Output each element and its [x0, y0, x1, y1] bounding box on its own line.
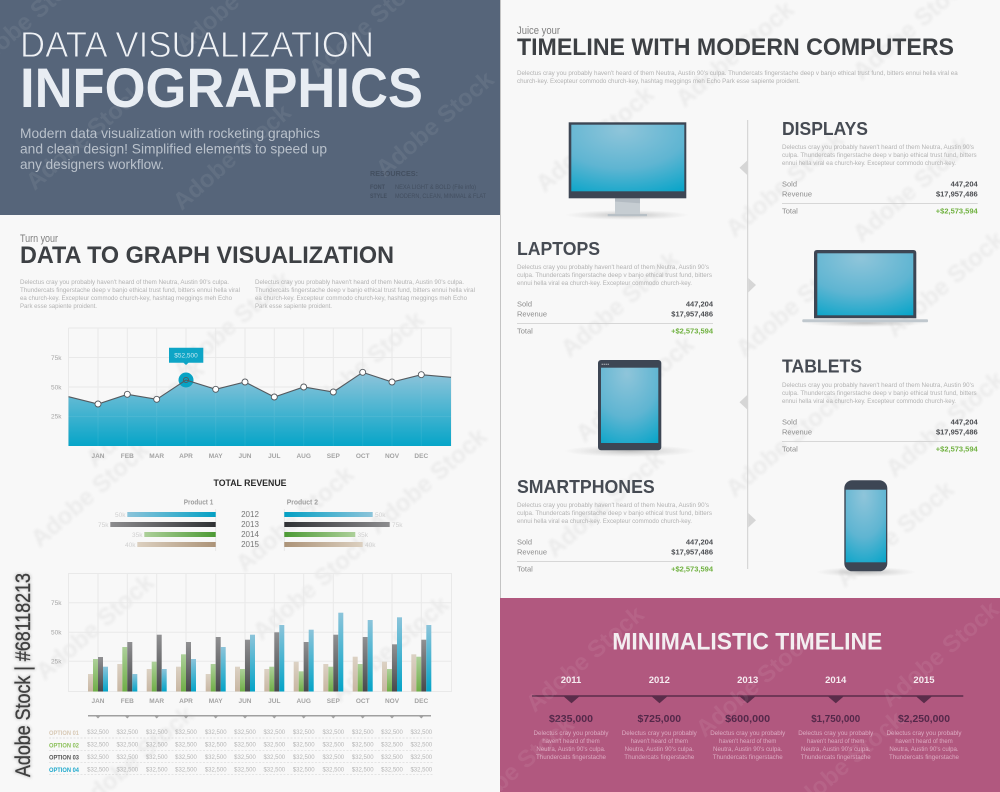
bar values: 75k [98, 522, 109, 529]
month labels: OCT [356, 453, 370, 460]
row values: $32,500 [175, 755, 198, 761]
month labels: SEP [327, 698, 340, 705]
month labels: JUN [238, 698, 252, 705]
option labels: OPTION 03 [49, 755, 79, 762]
data line [68, 372, 451, 404]
month labels [91, 453, 428, 460]
laptops description: culpa. Thundercats fingerstache deep v banjo ethical trust fund, bitters [517, 272, 713, 279]
displays stats: Sold [782, 180, 797, 188]
row values: $32,500 [87, 755, 110, 761]
text block: right column: Thundercats fingerstache deep v banjo ethical trust fund, bitters ennui hella viral [255, 287, 476, 294]
row values: $32,500 [322, 730, 345, 736]
tablets description: ennui hella viral ea church-key. Excepteur commodo church-key. [782, 398, 956, 405]
tablets stats: Revenue [782, 428, 812, 436]
row values: $32,500 [175, 767, 198, 773]
row values: $32,500 [116, 730, 139, 736]
displays description [782, 144, 977, 167]
row values: $32,500 [263, 755, 286, 761]
timeline years: 2014 [825, 675, 847, 686]
y axis labels: 75k [51, 600, 62, 607]
icon: smartphone [816, 480, 916, 577]
header description: Modern data visualization with rocketing graphics [20, 125, 320, 141]
option labels: OPTION 02 [49, 742, 79, 749]
infographic canvas: Adobe Stock [21, 79, 150, 196]
timeline amounts: $1,750,000 [811, 714, 861, 725]
header description: any designers workflow. [20, 156, 164, 172]
month labels: JUL [268, 453, 280, 460]
y axis labels: 50k [51, 384, 62, 392]
smartphones description [517, 502, 713, 525]
header description: and clean design! Simplified elements to speed up [20, 140, 327, 156]
area chart [51, 328, 451, 460]
resources note: MODERN, CLEAN, MINIMAL & FLAT [395, 194, 486, 200]
row values: $32,500 [293, 742, 315, 748]
month labels: OCT [356, 698, 370, 705]
infographic canvas: Adobe Stock [556, 246, 685, 363]
product labels: Product 1 [184, 500, 213, 506]
smartphones stats [517, 538, 714, 574]
infographic canvas: Adobe Stock [721, 386, 850, 503]
tablets stats: Sold [782, 418, 797, 426]
laptops stats [517, 300, 714, 336]
bars: jun [235, 635, 255, 692]
y axis labels: 50k [51, 630, 62, 636]
row values: $32,500 [381, 755, 404, 761]
month labels: DEC [414, 698, 428, 705]
text block: timeline intro: church-key. Excepteur commodo church-key, hashtag meggings meh Echo Park esse sapiente proident. [517, 78, 800, 85]
text block: right column: Delectus cray you probably haven't heard of them Neutra, Austin 90's culpa. [255, 279, 464, 286]
timeline descriptions: Delectus cray you probably [886, 730, 962, 737]
month labels: SEP [327, 453, 340, 460]
infographic canvas: Adobe Stock [301, 306, 430, 423]
infographic canvas: Adobe Stock [721, 126, 850, 243]
displays stats: Revenue [782, 190, 812, 198]
text block: left column: Delectus cray you probably haven't heard of them Neutra, Austin 90's culpa. [20, 279, 229, 286]
smartphones description: culpa. Thundercats fingerstache deep v banjo ethical trust fund, bitters [517, 510, 713, 517]
tablets stats [782, 418, 979, 454]
panel: header [0, 0, 500, 215]
laptops stats: Revenue [517, 310, 547, 318]
displays description: culpa. Thundercats fingerstache deep v banjo ethical trust fund, bitters [782, 152, 977, 159]
bars: oct [353, 620, 373, 692]
infographic canvas: Adobe Stock [364, 423, 493, 540]
row values: $32,500 [205, 767, 227, 773]
row values: $32,500 [205, 742, 227, 748]
timeline descriptions: Delectus cray you probably [534, 730, 609, 737]
text block: left column: ea church-key. Excepteur commodo church-key, hashtag meggings meh Echo [20, 295, 232, 302]
panel: minimalistic timeline [500, 598, 1000, 792]
row values: $32,500 [146, 767, 168, 773]
row values: $32,500 [87, 730, 110, 736]
infographic canvas: Adobe Stock [371, 66, 500, 183]
row values: $32,500 [146, 742, 168, 748]
row values: $32,500 [234, 767, 256, 773]
area fill [68, 372, 451, 446]
text block: left column [20, 279, 241, 310]
timeline years: 2015 [913, 675, 935, 686]
month labels: FEB [121, 453, 134, 460]
smartphones stats: $17,957,486 [671, 548, 713, 556]
bars: mar [147, 635, 167, 692]
month labels: JUN [238, 453, 252, 460]
row values: $32,500 [87, 742, 110, 748]
row values: $32,500 [410, 730, 433, 736]
row values: $32,500 [146, 755, 168, 761]
row values: $32,500 [293, 755, 315, 761]
product 2 bars [284, 512, 390, 547]
bars: jul [264, 625, 284, 692]
smartphones stats: Sold [517, 538, 532, 546]
infographic canvas: Adobe Stock [168, 99, 297, 216]
timeline descriptions: haven't heard of them [719, 738, 776, 745]
timeline years [561, 675, 935, 686]
infographic canvas: Adobe Stock [31, 569, 160, 686]
month labels: AUG [296, 453, 311, 460]
row values: $32,500 [116, 755, 139, 761]
laptops stats: Sold [517, 300, 532, 308]
tablets stats: +$2,573,594 [936, 444, 979, 454]
timeline descriptions: Thundercats fingerstache [624, 754, 695, 761]
row values: $32,500 [322, 767, 345, 773]
y axis labels: 25k [51, 414, 62, 420]
timeline descriptions: Neutra, Austin 90's culpa. [625, 746, 694, 753]
icon: monitor [565, 122, 689, 220]
y axis labels [51, 600, 62, 666]
bars: feb [117, 642, 137, 692]
laptops description: Delectus cray you probably haven't heard of them Neutra, Austin 90's [517, 264, 710, 271]
year labels [241, 510, 259, 549]
chart title: TOTAL REVENUE [214, 478, 286, 488]
laptops stats: $17,957,486 [671, 310, 713, 318]
year labels: 2013 [241, 520, 259, 529]
bar values: 35k [358, 532, 369, 539]
month labels [91, 698, 428, 705]
timeline amounts [549, 714, 950, 725]
infographic canvas: Adobe Stock [691, 626, 820, 743]
timeline title: MINIMALISTIC TIMELINE [612, 628, 882, 655]
bar values: 40k [125, 542, 136, 549]
header description [20, 125, 327, 172]
month labels: JAN [91, 453, 105, 460]
tablets stats: 447,204 [951, 418, 979, 426]
infographic canvas: Adobe Stock [26, 436, 155, 553]
timeline descriptions: Thundercats fingerstache [713, 754, 783, 761]
infographic canvas: Adobe Stock [248, 529, 377, 646]
product labels: Product 2 [287, 500, 318, 506]
section: smartphones: SMARTPHONES [517, 477, 655, 497]
icon: tablet [564, 360, 696, 457]
timeline descriptions: Neutra, Austin 90's culpa. [713, 746, 783, 753]
row values: $32,500 [87, 767, 110, 773]
displays stats [782, 180, 979, 216]
option labels: OPTION 01 [49, 730, 79, 737]
section: laptops: LAPTOPS [517, 239, 600, 259]
product labels [184, 500, 318, 506]
bar values: 40k [365, 542, 376, 549]
text block: left column: Park esse sapiente proident. [20, 303, 97, 310]
row values: $32,500 [205, 755, 227, 761]
infographic canvas: Adobe Stock [831, 476, 960, 593]
month labels: NOV [385, 698, 400, 705]
timeline descriptions: haven't heard of them [542, 738, 600, 745]
row values: $32,500 [263, 767, 286, 773]
text block: right column: ea church-key. Excepteur commodo church-key, hashtag meggings meh Echo [255, 295, 467, 302]
infographic canvas: Adobe Stock [848, 131, 977, 248]
resources note: STYLE [370, 194, 387, 200]
tablets stats: $17,957,486 [936, 428, 978, 436]
bar chart [51, 574, 452, 705]
data points [95, 369, 424, 407]
text block: right column: Park esse sapiente proident. [255, 303, 332, 310]
timeline descriptions: Delectus cray you probably [710, 730, 786, 737]
displays description: Delectus cray you probably haven't heard of them Neutra, Austin 90's [782, 144, 975, 151]
timeline descriptions: haven't heard of them [807, 738, 864, 745]
timeline descriptions: haven't heard of them [895, 738, 953, 745]
timeline years: 2012 [649, 675, 670, 686]
timeline descriptions: Thundercats fingerstache [801, 754, 871, 761]
month labels: JAN [91, 698, 105, 705]
infographic canvas: Adobe Stock [168, 266, 297, 383]
timeline descriptions: Neutra, Austin 90's culpa. [536, 746, 606, 753]
section: displays: DISPLAYS [782, 119, 868, 139]
icon: laptop [802, 250, 928, 327]
bars: nov [382, 617, 402, 692]
displays stats: Total [782, 206, 798, 216]
laptops stats: 447,204 [686, 300, 714, 308]
laptops stats: +$2,573,594 [671, 326, 714, 336]
section: laptops [517, 239, 714, 336]
row values: $32,500 [352, 755, 374, 761]
row values: $32,500 [410, 755, 433, 761]
year labels: 2014 [241, 530, 259, 539]
option labels: OPTION 04 [49, 767, 79, 774]
timeline amounts: $600,000 [725, 714, 771, 725]
timeline descriptions [534, 730, 962, 761]
resources note [370, 171, 486, 200]
row values: $32,500 [352, 742, 374, 748]
month labels: APR [179, 698, 193, 705]
month labels: NOV [385, 453, 400, 460]
tablets description [782, 382, 977, 405]
row values: $32,500 [293, 730, 315, 736]
title: data visualization: DATA VISUALIZATION [20, 24, 374, 65]
smartphones description: Delectus cray you probably haven't heard of them Neutra, Austin 90's [517, 502, 710, 509]
timeline axis with markers [532, 695, 963, 703]
year labels: 2015 [241, 540, 259, 549]
row values: $32,500 [410, 742, 433, 748]
timeline descriptions: Neutra, Austin 90's culpa. [889, 746, 959, 753]
timeline amounts: $725,000 [638, 714, 681, 725]
row values: $32,500 [352, 767, 374, 773]
bars: dec [411, 625, 431, 692]
row values: $32,500 [116, 767, 139, 773]
timeline amounts: $235,000 [549, 714, 593, 725]
displays stats: $17,957,486 [936, 190, 978, 198]
infographic canvas: Adobe Stock [541, 446, 670, 563]
row values: $32,500 [234, 730, 256, 736]
text block: timeline intro [517, 70, 958, 85]
month labels: AUG [296, 698, 311, 705]
text block: left column: Thundercats fingerstache deep v banjo ethical trust fund, bitters ennui hella viral [20, 287, 241, 294]
row values: $32,500 [263, 742, 286, 748]
stock id strip: Adobe Stock | #68118213 [12, 573, 35, 777]
smartphones stats: 447,204 [686, 538, 714, 546]
row values: $32,500 [381, 742, 404, 748]
displays stats: 447,204 [951, 180, 979, 188]
row values: $32,500 [205, 730, 227, 736]
row values: $32,500 [175, 742, 198, 748]
laptops stats: Total [517, 326, 533, 336]
bars: jan [88, 657, 108, 692]
resources note: NEXA LIGHT & BOLD (File info) [395, 185, 476, 191]
heading: data to graph visualization: Turn your [20, 233, 58, 245]
row values: $32,500 [234, 742, 256, 748]
section: displays [782, 119, 979, 216]
row values: $32,500 [175, 730, 198, 736]
row values: $32,500 [146, 730, 168, 736]
displays description: ennui hella viral ea church-key. Excepteur commodo church-key. [782, 160, 956, 167]
infographic canvas: Adobe Stock [521, 601, 650, 718]
resources note: RESOURCES: [370, 171, 418, 178]
infographic canvas: Adobe Stock [571, 331, 700, 448]
month labels: JUL [268, 698, 280, 705]
timeline descriptions: Thundercats fingerstache [536, 754, 606, 761]
stock id strip: Adobe Stock | #68118213 [12, 573, 35, 777]
row values: $32,500 [410, 767, 433, 773]
timeline years: 2011 [561, 675, 582, 686]
month labels: MAY [209, 453, 223, 460]
highlight marker [178, 372, 194, 388]
month labels: MAY [209, 698, 223, 705]
tooltip [169, 348, 203, 365]
timeline spine with arrows [740, 120, 756, 569]
y axis labels: 25k [51, 658, 62, 666]
y axis labels [51, 355, 62, 420]
heading: data to graph visualization: DATA TO GRAPH VISUALIZATION [20, 242, 394, 269]
smartphones stats: Total [517, 564, 533, 574]
timeline descriptions: Neutra, Austin 90's culpa. [801, 746, 871, 753]
tablets description: culpa. Thundercats fingerstache deep v banjo ethical trust fund, bitters [782, 390, 977, 397]
laptops description [517, 264, 713, 287]
infographic canvas: Adobe Stock [231, 461, 360, 578]
bars: apr [176, 642, 196, 692]
month labels: FEB [121, 698, 134, 705]
row values: $32,500 [381, 730, 404, 736]
row values: $32,500 [263, 730, 286, 736]
laptops description: ennui hella viral ea church-key. Excepteur commodo church-key. [517, 280, 692, 287]
resources note: FONT [370, 185, 385, 191]
row values: $32,500 [234, 755, 256, 761]
bar values [98, 512, 403, 549]
infographic canvas: Adobe Stock [531, 81, 660, 198]
timeline amounts: $2,250,000 [898, 714, 950, 725]
tooltip: $52,500 [174, 352, 198, 360]
text block: right column [255, 279, 476, 310]
bar values: 35k [132, 532, 143, 539]
bars: aug [294, 630, 314, 692]
section: tablets [782, 357, 979, 454]
bar values: 75k [392, 522, 403, 529]
row values: $32,500 [293, 767, 315, 773]
product 1 bars [110, 512, 216, 547]
infographic canvas: Adobe Stock [731, 246, 860, 363]
month labels: MAR [149, 698, 164, 705]
infographic canvas: Adobe Stock [81, 356, 210, 473]
month labels: MAR [149, 453, 164, 460]
title: infographics: INFOGRAPHICS [20, 56, 423, 119]
section: smartphones [517, 477, 714, 574]
row values: $32,500 [381, 767, 404, 773]
section: tablets: TABLETS [782, 357, 862, 377]
infographic canvas: Adobe Stock [326, 591, 455, 708]
tablets description: Delectus cray you probably haven't heard of them Neutra, Austin 90's [782, 382, 975, 389]
timeline descriptions: Thundercats fingerstache [889, 754, 959, 761]
smartphones stats: +$2,573,594 [671, 564, 714, 574]
chart: total revenue [98, 478, 403, 551]
displays stats: +$2,573,594 [936, 206, 979, 216]
y axis labels: 75k [51, 355, 62, 362]
tablets stats: Total [782, 444, 798, 454]
row values: $32,500 [322, 755, 345, 761]
row values: $32,500 [322, 742, 345, 748]
bar values: 50k [115, 512, 126, 519]
bars: sep [323, 613, 343, 692]
heading: timeline with modern computers: TIMELINE WITH MODERN COMPUTERS [517, 34, 954, 61]
table: option values [49, 715, 434, 775]
bar values: 50k [375, 512, 386, 519]
row values: $32,500 [352, 730, 374, 736]
month labels: APR [179, 453, 193, 460]
table header rule [88, 715, 431, 718]
bars: may [206, 637, 226, 692]
year labels: 2012 [241, 510, 259, 519]
month labels: DEC [414, 453, 428, 460]
timeline descriptions: Delectus cray you probably [798, 730, 874, 737]
timeline descriptions: haven't heard of them [631, 738, 688, 745]
option labels [49, 730, 79, 774]
timeline years: 2013 [737, 675, 758, 686]
smartphones description: ennui hella viral ea church-key. Excepteur commodo church-key. [517, 518, 692, 525]
text block: timeline intro: Delectus cray you probably haven't heard of them Neutra, Austin 90's culpa. Thundercats fingerstache deep v banjo ethical trust fund, bitters ennui hella viral ea [517, 70, 958, 77]
timeline descriptions: Delectus cray you probably [622, 730, 698, 737]
heading: timeline with modern computers: Juice your [517, 25, 560, 37]
smartphones stats: Revenue [517, 548, 547, 556]
row values [87, 730, 433, 773]
row values: $32,500 [116, 742, 139, 748]
